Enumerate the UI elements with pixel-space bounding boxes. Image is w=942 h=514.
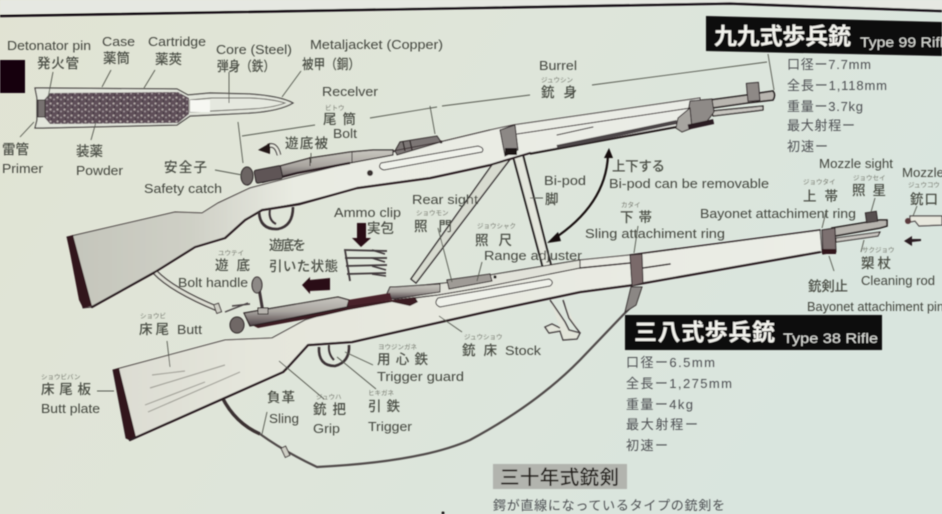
Type 38 sling bbox=[222, 308, 630, 467]
Type 99 muzzle barrel bbox=[710, 82, 774, 116]
Type 38 specs bbox=[626, 355, 732, 453]
Type 99 part labels: 上下する bbox=[612, 159, 665, 174]
Type 38 part labels: 銃床 bbox=[462, 343, 498, 358]
Type 38 part labels: Butt bbox=[177, 323, 203, 337]
Type 99 stock dark underside bbox=[92, 153, 530, 307]
arrow: down to ammo clip bbox=[352, 223, 371, 247]
Type 38 bolt body bbox=[230, 293, 418, 333]
Type 38 part labels: Grip bbox=[313, 422, 340, 436]
Type 38 part labels: Sling attachiment ring bbox=[585, 227, 725, 241]
Type 38 part labels: ジョウセイ bbox=[853, 174, 886, 182]
cartridge labels: 被甲（銅） bbox=[302, 57, 360, 72]
Type 38 part labels: 槊杖 bbox=[861, 256, 892, 271]
cartridge labels: 装薬 bbox=[76, 144, 104, 159]
Type 38 stock top lines bbox=[580, 230, 820, 268]
Type 38 part labels: 照星 bbox=[852, 183, 886, 198]
Type 38 part labels: ショウビバン bbox=[41, 372, 80, 381]
Type 99 part labels: Recelver bbox=[322, 85, 378, 99]
Type 99 part labels bbox=[144, 54, 774, 274]
Type 38 butt plate bbox=[113, 368, 136, 440]
Type 38 specs: 初速ー bbox=[626, 438, 668, 453]
Type 38 part labels: 銃把 bbox=[313, 402, 346, 417]
Type 99 sling bbox=[155, 272, 250, 313]
Type 38 part labels: Cleaning rod bbox=[861, 274, 935, 288]
arrow: bolt pull direction bbox=[302, 277, 330, 294]
Type 99 part labels: 銃身 bbox=[541, 85, 577, 100]
Type 38 part labels: 銃剣止 bbox=[808, 279, 848, 294]
Type 38 part labels bbox=[41, 157, 942, 436]
Type 38 barrel bands bbox=[630, 228, 836, 286]
Type 38 muzzle barrel bbox=[832, 211, 887, 242]
Type 99 specs: 最大射程ー bbox=[787, 118, 855, 133]
Type 99 part labels: 遊底被 bbox=[285, 136, 328, 151]
Type 99 part labels: ビトウ bbox=[325, 103, 344, 112]
Type 38 title bar: Type 38 Rifle bbox=[783, 330, 878, 346]
Type 38 part labels: ヨウジンガネ bbox=[378, 342, 418, 351]
Type 38 part labels: 負革 bbox=[267, 389, 295, 405]
Type 99 title bar: Type 99 Rifle bbox=[860, 34, 942, 50]
cartridge labels: Core (Steel) bbox=[216, 43, 292, 57]
Type 38 part labels: 照尺 bbox=[475, 233, 512, 248]
Type 38 part labels: 上帯 bbox=[803, 189, 838, 204]
Type 99 stock bbox=[67, 98, 700, 308]
bullet core bbox=[190, 98, 285, 112]
Type 38 part labels: Trigger bbox=[368, 420, 412, 434]
Type 38 part labels: ジュウコウ bbox=[908, 181, 940, 189]
Type 38 stock dark underside bbox=[130, 252, 820, 440]
muzzle detail bbox=[904, 216, 942, 246]
Type 38 part labels: ヒキガネ bbox=[368, 388, 394, 397]
cartridge labels: Detonator pin bbox=[7, 39, 91, 53]
cartridge labels: 発火管 bbox=[37, 55, 79, 71]
Type 99 trigger guard bbox=[259, 207, 293, 229]
bayonet description: 鍔が直線になっているタイプの銃剣を bbox=[493, 498, 725, 513]
Type 38 part labels: ジョウタイ bbox=[803, 177, 836, 186]
Type 38 title bar bbox=[625, 315, 882, 350]
Type 38 grain shading bbox=[145, 365, 240, 412]
cartridge labels: Metaljacket (Copper) bbox=[310, 38, 443, 52]
Type 38 part labels: Bolt handle bbox=[178, 276, 248, 290]
Type 99 specs: 重量ー3.7kg bbox=[787, 99, 863, 114]
Type 99 part labels: 脚 bbox=[545, 192, 558, 207]
Type 38 stock bbox=[113, 230, 822, 440]
Type 99 title bar bbox=[706, 16, 942, 56]
Type 99 part labels: Bolt bbox=[333, 127, 358, 141]
Type 38 part labels: Range adjuster bbox=[484, 249, 582, 263]
Type 99 specs bbox=[787, 57, 887, 154]
Type 38 part labels: 用心鉄 bbox=[377, 351, 428, 367]
Type 99 title bar: 九九式歩兵銃 bbox=[714, 23, 851, 49]
Type 99 part labels: Safety catch bbox=[144, 182, 222, 196]
Type 99 specs: 全長ー1,118mm bbox=[787, 78, 887, 93]
Type 38 receiver bbox=[385, 260, 580, 300]
Type 38 part labels: ジュウショウ bbox=[464, 333, 503, 341]
Type 99 butt plate bbox=[67, 235, 92, 308]
Type 38 part labels: 床尾 bbox=[139, 322, 169, 337]
Type 99 part labels: 引いた状態 bbox=[269, 258, 338, 274]
cartridge labels: 薬筒 bbox=[103, 50, 130, 66]
Type 38 part labels: Stock bbox=[505, 344, 542, 358]
cartridge labels: 薬莢 bbox=[155, 52, 182, 67]
Type 38 part labels: ジョウシャク bbox=[477, 222, 516, 230]
bayonet section heading: 三十年式銃剣 bbox=[500, 467, 619, 489]
cartridge case bbox=[35, 88, 293, 128]
Type 38 rifle illustration bbox=[113, 211, 887, 467]
cartridge labels: 雷管 bbox=[2, 141, 29, 157]
cartridge labels: Cartridge bbox=[148, 35, 206, 49]
Type 38 part labels: 銃口 bbox=[910, 192, 938, 207]
Type 38 part labels: ショウビ bbox=[140, 311, 166, 320]
Type 38 part labels: Mozzle sight bbox=[819, 157, 894, 171]
Type 99 specs: 初速ー bbox=[787, 139, 828, 154]
Type 99 part labels: ジュウシン bbox=[541, 76, 573, 84]
Type 99 part labels: 遊底を bbox=[269, 238, 306, 253]
Type 99 barrel bands bbox=[500, 99, 714, 156]
Type 99 part labels: 尾筒 bbox=[323, 111, 356, 127]
Type 38 specs: 口径ー6.5mm bbox=[626, 355, 715, 370]
Type 38 part labels: Sling bbox=[269, 412, 299, 426]
ammo clip bbox=[344, 250, 387, 281]
bullet base bbox=[190, 100, 210, 112]
powder fill bbox=[44, 92, 189, 124]
Type 99 part labels: 遊底 bbox=[215, 258, 250, 273]
Type 38 specs: 全長ー1,275mm bbox=[626, 376, 732, 391]
Type 38 specs: 重量ー4kg bbox=[626, 397, 693, 412]
Type 38 part labels: カタイ bbox=[621, 200, 640, 209]
cartridge labels: Primer bbox=[2, 162, 43, 176]
Type 99 part labels: Ammo clip bbox=[334, 206, 401, 220]
Type 99 part labels: Bi-pod bbox=[544, 174, 586, 188]
cartridge labels: Powder bbox=[76, 164, 123, 178]
Type 99 part labels: ユウテイ bbox=[218, 249, 244, 257]
cartridge labels: 弾身（鉄） bbox=[217, 58, 275, 74]
Type 38 bolt handle bbox=[252, 277, 268, 314]
Type 38 part labels: 床尾板 bbox=[41, 382, 92, 397]
black tab at left edge bbox=[0, 60, 25, 93]
Type 38 specs: 最大射程ー bbox=[626, 417, 698, 432]
Type 38 bipod lower legs and foot bbox=[545, 300, 580, 340]
Type 99 part labels: 実包 bbox=[367, 220, 394, 236]
Type 99 stock lines bbox=[517, 107, 697, 154]
Type 99 part labels: Burrel bbox=[539, 59, 577, 73]
Type 38 part labels: 下帯 bbox=[620, 210, 652, 225]
Type 99 rifle illustration bbox=[67, 82, 774, 313]
stray dot at bottom edge bbox=[442, 512, 444, 514]
Type 99 part labels: Bi-pod can be removable bbox=[609, 177, 769, 191]
Type 38 sling swivel bbox=[625, 287, 642, 312]
curved bipod arrow bbox=[547, 148, 613, 243]
Type 99 magazine slot bbox=[380, 146, 483, 170]
primer bbox=[38, 100, 45, 117]
Type 99 receiver and bolt bbox=[241, 130, 490, 185]
Type 38 part labels: 照門 bbox=[414, 219, 452, 234]
Type 38 title bar: 三八式歩兵銃 bbox=[634, 319, 775, 345]
Type 38 part labels: 引鉄 bbox=[368, 398, 400, 414]
cartridge labels bbox=[2, 35, 443, 178]
Type 99 stock screw bbox=[367, 170, 373, 176]
Type 99 bipod legs bbox=[411, 155, 551, 283]
Type 38 part labels: Mozzle bbox=[902, 166, 942, 180]
Type 38 part labels: Butt plate bbox=[41, 402, 100, 416]
cartridge cutaway diagram bbox=[35, 88, 293, 128]
Type 38 part labels: Bayonet attachiment pin bbox=[807, 300, 942, 314]
Type 99 specs: 口径ー7.7mm bbox=[787, 57, 871, 72]
Type 99 part labels: 安全子 bbox=[164, 160, 207, 175]
Type 38 part labels: ジュウハ bbox=[316, 393, 342, 401]
arrow: bolt direction on upper rifle bbox=[258, 143, 279, 155]
Type 38 magazine slot bbox=[436, 279, 552, 307]
Type 38 part labels: Bayonet attachiment ring bbox=[700, 207, 856, 221]
Type 38 part labels: Rear sight bbox=[412, 193, 479, 207]
cartridge labels: Case bbox=[102, 35, 135, 49]
Type 38 part labels: サクジョウ bbox=[862, 246, 894, 254]
Type 38 trigger guard bbox=[319, 345, 349, 366]
top rule of page bbox=[0, 0, 942, 16]
Type 38 part labels: Trigger guard bbox=[377, 370, 464, 384]
Type 38 part labels: ショウモン bbox=[416, 209, 448, 217]
